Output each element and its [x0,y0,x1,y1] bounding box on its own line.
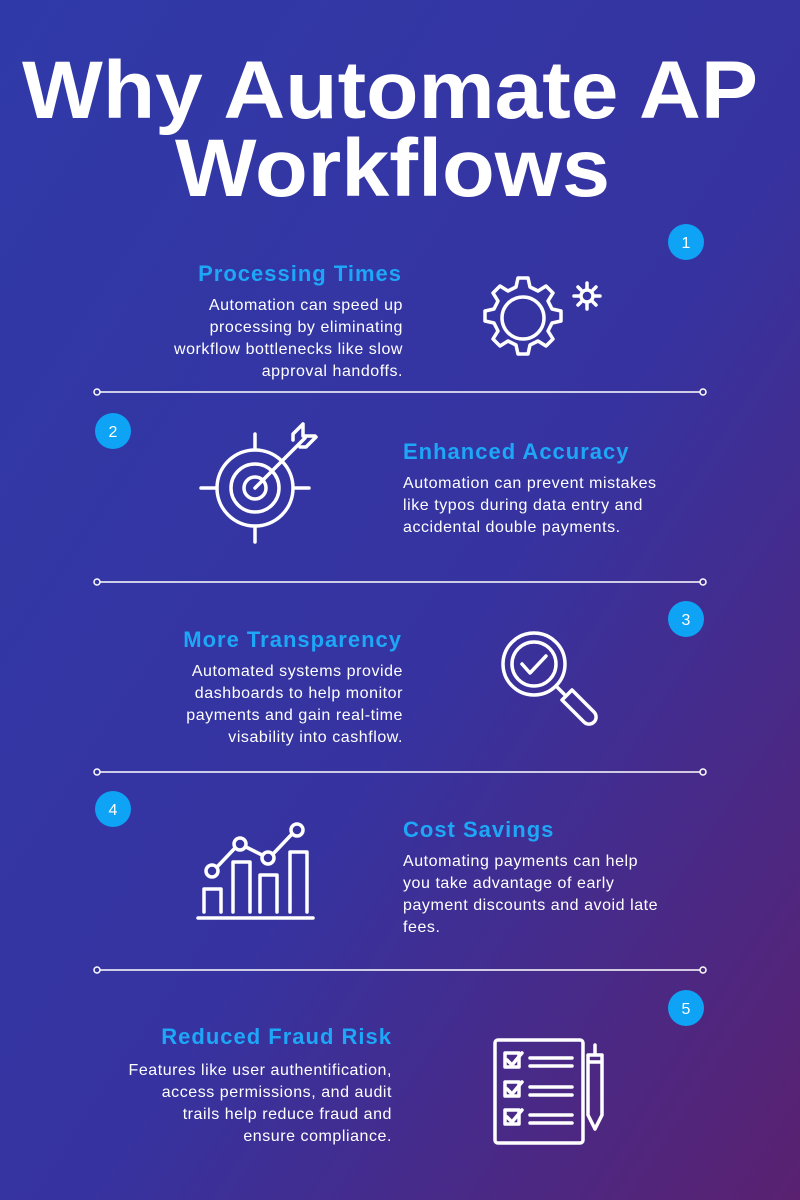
badge 1 [668,224,704,260]
divider 3 [94,769,706,775]
body 1: approval handoffs. [262,363,403,380]
heading 3: More Transparency [183,627,402,652]
body 5: Features like user authentification, [128,1062,392,1079]
body 1 [173,297,403,380]
body 4: fees. [403,919,440,936]
body 5 [128,1062,392,1145]
badge 5 [668,990,704,1026]
icon: target [201,424,316,542]
icon: gears [485,278,600,354]
body 3 [186,663,403,746]
badge 2 [95,413,131,449]
body 2: Automation can prevent mistakes [403,475,657,492]
section 4: cost savings [95,791,658,936]
icon: bar chart [198,824,313,918]
badge 2: 2 [109,424,118,441]
body 3: Automated systems provide [192,663,403,680]
body 3: dashboards to help monitor [195,685,403,702]
badge 3: 3 [682,612,691,629]
icon: magnifier [503,633,596,724]
badge 4: 4 [109,802,118,819]
body 4: Automating payments can help [403,853,638,870]
body 5: access permissions, and audit [162,1084,392,1101]
body 4: you take advantage of early [403,875,614,892]
title: Workflows [175,123,610,214]
icon: checklist [495,1040,602,1143]
body 4 [403,853,658,936]
body 4: payment discounts and avoid late [403,897,658,914]
body 1: Automation can speed up [209,297,403,314]
divider 2 [94,579,706,585]
body 3: payments and gain real-time [186,707,403,724]
body 2: accidental double payments. [403,519,621,536]
body 3: visability into cashflow. [228,729,403,746]
heading 4: Cost Savings [403,817,554,842]
divider 4 [94,967,706,973]
body 1: processing by eliminating [210,319,403,336]
body 5: ensure compliance. [243,1128,392,1145]
heading 2: Enhanced Accuracy [403,439,630,464]
badge 4 [95,791,131,827]
section 1: processing times [173,224,704,380]
title [22,45,758,214]
body 5: trails help reduce fraud and [183,1106,392,1123]
heading 1: Processing Times [198,261,402,286]
section 2: enhanced accuracy [95,413,657,542]
body 2: like typos during data entry and [403,497,643,514]
badge 3 [668,601,704,637]
title: Why Automate AP [22,45,758,136]
section 5: reduced fraud risk [128,990,704,1145]
divider 1 [94,389,706,395]
section 3: more transparency [183,601,704,746]
body 1: workflow bottlenecks like slow [173,341,403,358]
badge 1: 1 [682,235,691,252]
heading 5: Reduced Fraud Risk [161,1024,392,1049]
body 2 [403,475,657,536]
badge 5: 5 [682,1001,691,1018]
